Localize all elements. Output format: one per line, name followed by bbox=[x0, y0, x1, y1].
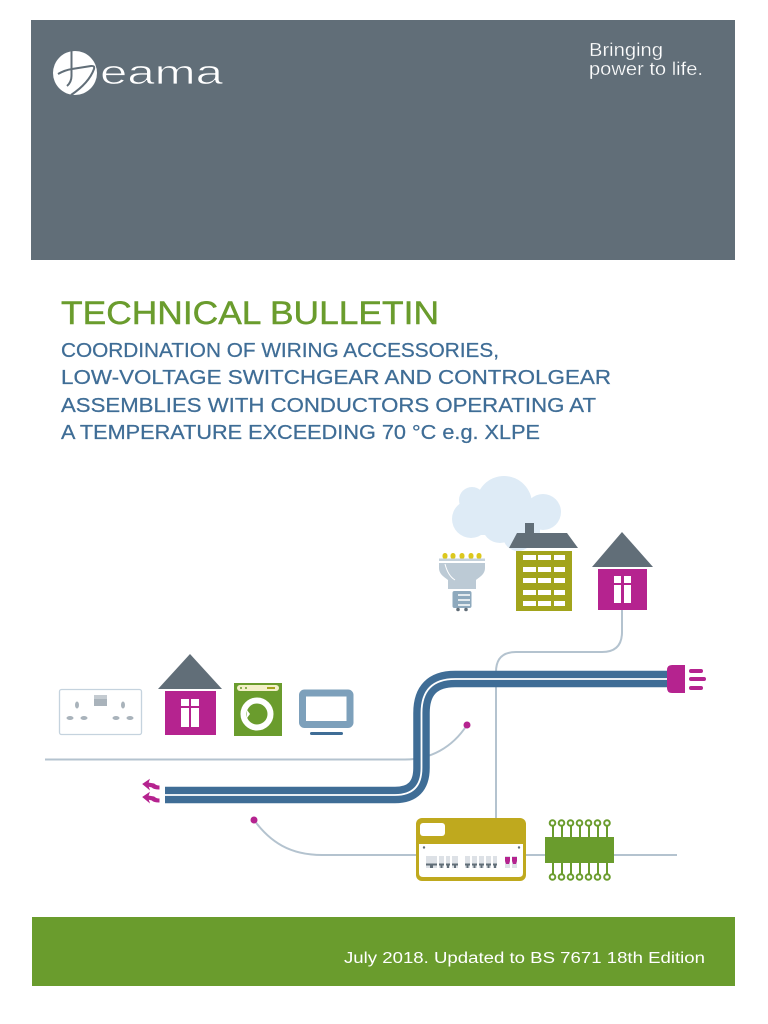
wire end dots bbox=[250, 722, 470, 824]
subtitle: COORDINATION OF WIRING ACCESSORIES, bbox=[61, 339, 499, 362]
subtitle bbox=[61, 339, 611, 444]
tagline: power to life. bbox=[589, 59, 703, 79]
logo: beama: eama bbox=[100, 54, 223, 92]
tagline: Bringing bbox=[589, 40, 663, 60]
grey wiring lines bbox=[45, 610, 677, 855]
footer text: July 2018. Updated to BS 7671 18th Edition bbox=[344, 950, 705, 967]
icon: circuit board bbox=[545, 820, 614, 880]
header band bbox=[31, 20, 735, 260]
icon: consumer unit bbox=[416, 818, 526, 881]
cable bbox=[165, 679, 667, 795]
logo: beama bbox=[53, 50, 223, 95]
icon: light bulb bbox=[439, 553, 485, 611]
icon: plug bbox=[667, 665, 706, 693]
icon: house left bbox=[158, 654, 222, 735]
tagline bbox=[589, 40, 703, 79]
footer band bbox=[32, 917, 735, 986]
icon: cable end arrows bbox=[143, 780, 159, 802]
icon: monitor bbox=[302, 693, 350, 735]
icon: apartment building bbox=[509, 523, 578, 611]
subtitle: ASSEMBLIES WITH CONDUCTORS OPERATING AT bbox=[61, 394, 597, 417]
subtitle: A TEMPERATURE EXCEEDING 70 °C e.g. XLPE bbox=[61, 421, 540, 444]
title: TECHNICAL BULLETIN bbox=[61, 295, 439, 331]
icon: washing machine bbox=[234, 683, 282, 736]
icon: cloud bbox=[452, 476, 561, 551]
icon: double socket bbox=[60, 690, 142, 734]
icon: house right bbox=[592, 532, 653, 610]
subtitle: LOW-VOLTAGE SWITCHGEAR AND CONTROLGEAR bbox=[61, 366, 611, 389]
